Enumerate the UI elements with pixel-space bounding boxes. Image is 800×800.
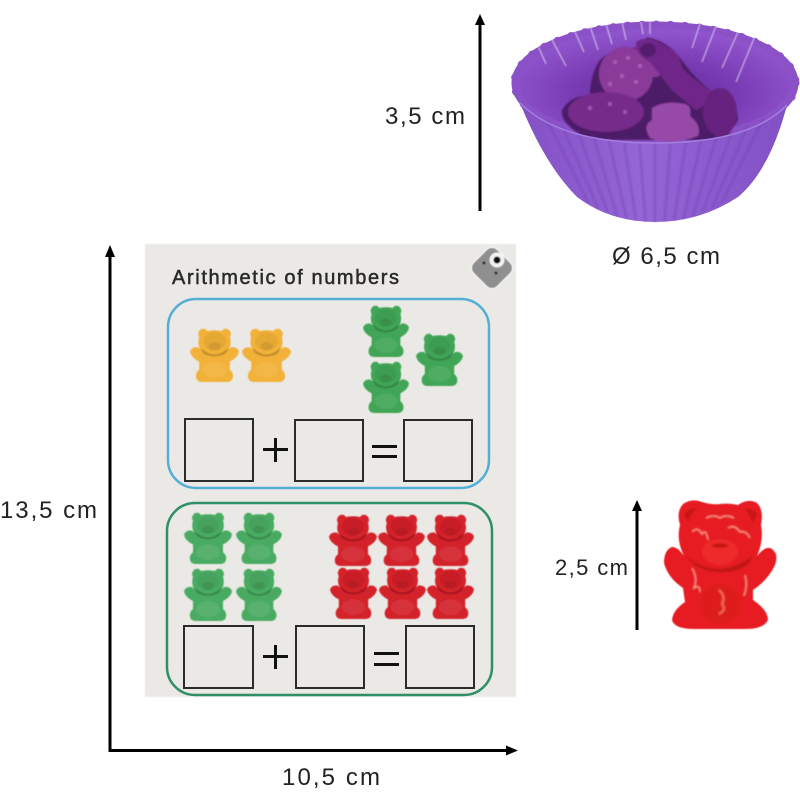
arrow: card height and width axes bbox=[105, 245, 518, 756]
arrow: cup height bbox=[475, 14, 485, 211]
equation boxes and signs bbox=[185, 419, 472, 481]
bear shading and muzzle bbox=[684, 509, 757, 624]
yellow bears bbox=[190, 329, 291, 382]
card title: Arithmetic of numbers bbox=[172, 267, 399, 289]
equation boxes and signs bbox=[184, 626, 474, 688]
panel: first addition exercise bbox=[168, 299, 489, 488]
green bears bbox=[184, 513, 282, 621]
icon: koala bbox=[468, 244, 516, 292]
red bears bbox=[329, 515, 474, 619]
purple bears in cup bbox=[562, 38, 738, 142]
green bears bbox=[363, 306, 463, 413]
label: cup diameter: Ø 6,5 cm bbox=[612, 243, 720, 270]
panel: arithmetic card bbox=[145, 244, 516, 697]
label: card width: 10,5 cm bbox=[282, 764, 380, 791]
cup interior with scalloped rim bbox=[515, 22, 795, 141]
label: bear height: 2,5 cm bbox=[555, 555, 628, 580]
cup outer wall with ribs bbox=[520, 103, 787, 222]
arrow: bear height bbox=[632, 500, 642, 630]
panel: second addition exercise bbox=[167, 503, 492, 695]
blue frame bbox=[168, 299, 489, 488]
card background bbox=[145, 244, 516, 697]
label: card height: 13,5 cm bbox=[0, 497, 97, 524]
green frame bbox=[167, 503, 492, 695]
photo: red counting bear bbox=[664, 500, 776, 629]
label: cup height: 3,5 cm bbox=[385, 103, 465, 130]
photo: purple cup with bears bbox=[515, 22, 795, 222]
